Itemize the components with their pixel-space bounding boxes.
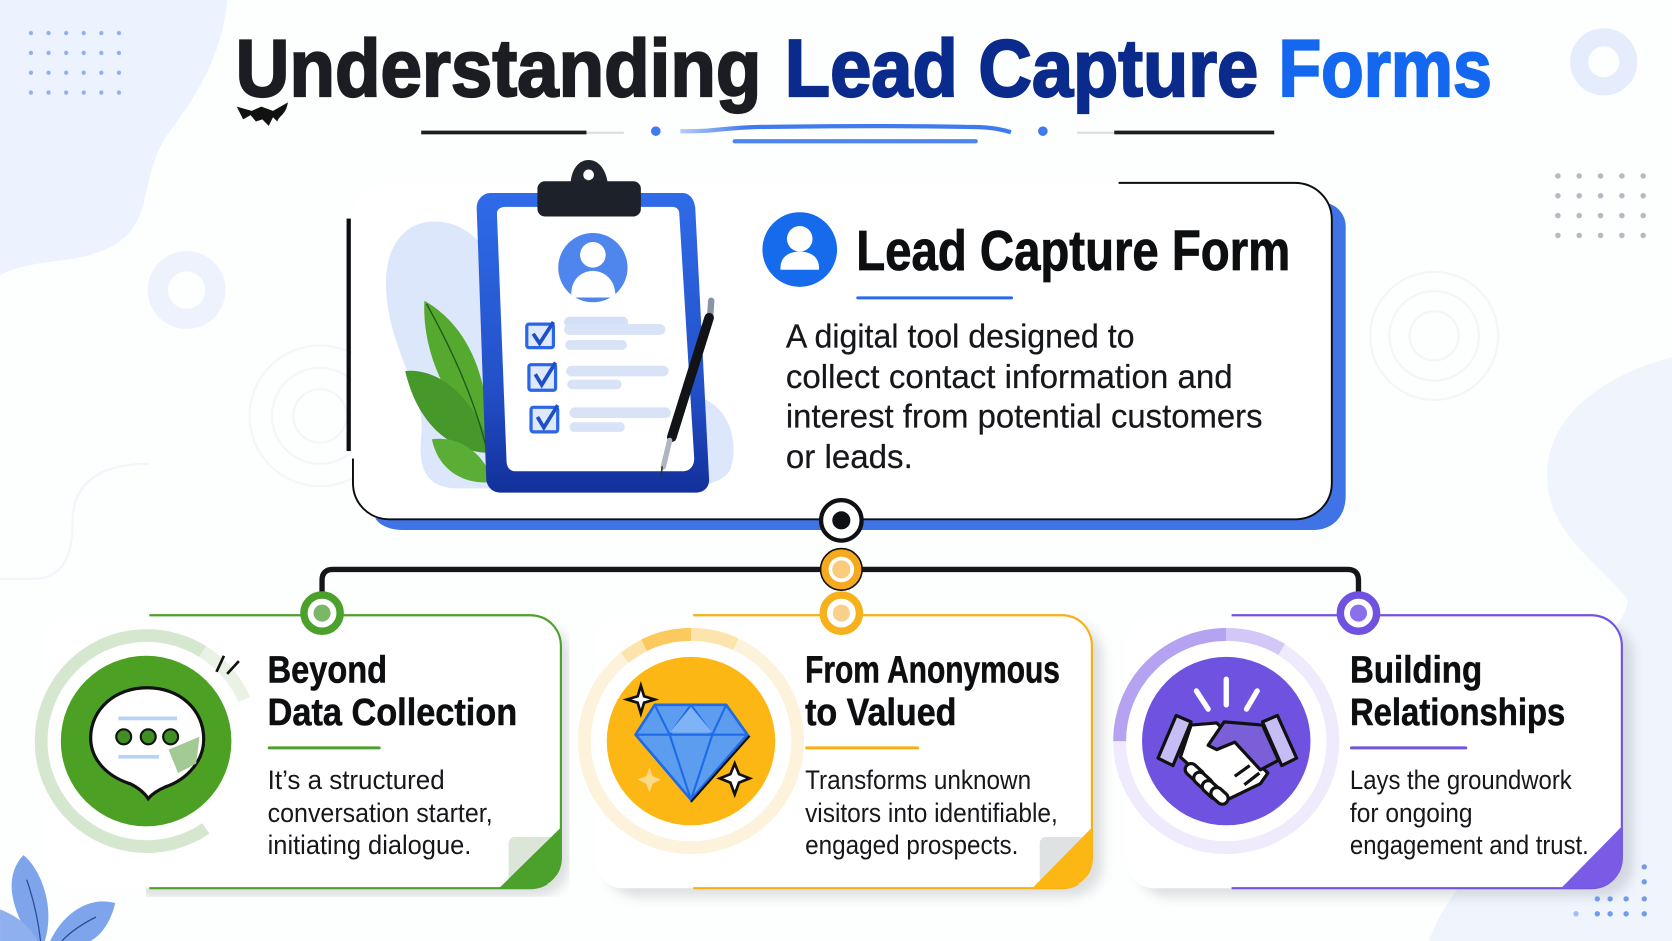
card text: conversation starter, [268, 798, 493, 828]
cuffs [1158, 715, 1191, 766]
description: or leads. [786, 439, 913, 476]
pen [661, 301, 711, 476]
card outline [353, 183, 1332, 519]
card title: Beyond [268, 648, 387, 691]
description: collect contact information and [786, 359, 1233, 396]
card underline [268, 746, 381, 749]
icon: speech bubble [41, 635, 244, 847]
card text: engaged prospects. [805, 830, 1018, 860]
card title: From Anonymous [805, 648, 1060, 691]
leaves [405, 301, 493, 483]
card left edge [347, 219, 351, 451]
decoration: dots bottom right [1573, 864, 1647, 916]
connector node [1340, 595, 1377, 631]
card body [352, 182, 1332, 519]
card outline [1232, 615, 1622, 888]
card title [1350, 648, 1565, 734]
decoration: faint line left [0, 464, 149, 579]
decoration: ring left [158, 261, 215, 319]
card title: Relationships [1350, 691, 1565, 734]
card underline [1350, 746, 1467, 749]
decoration: concentric rings right [1370, 272, 1498, 400]
card surface [606, 624, 1103, 897]
panel: lead capture form [347, 160, 1346, 530]
blob: right [1429, 357, 1672, 941]
fingers [1183, 761, 1231, 807]
connector node [304, 595, 340, 631]
card text [1350, 765, 1589, 860]
panel: from anonymous to valued [584, 595, 1103, 897]
corner fold [1561, 826, 1622, 888]
card text: for ongoing [1350, 798, 1473, 828]
card title: Building [1350, 648, 1482, 691]
decoration: dots top right [1551, 168, 1650, 241]
description [786, 319, 1263, 476]
decoration: leaves bottom left [0, 855, 115, 941]
card text: initiating dialogue. [268, 830, 471, 860]
heading underline [856, 296, 1013, 299]
panel: building relationships [1120, 595, 1634, 897]
card text: Lays the groundwork [1350, 765, 1572, 795]
card text: Transforms unknown [805, 765, 1031, 795]
card title: Data Collection [268, 691, 517, 734]
title: Forms [1279, 24, 1492, 114]
card outline [693, 615, 1092, 888]
blob: top left [0, 0, 227, 275]
card text [268, 765, 493, 860]
illustration: clipboard [386, 160, 734, 493]
card surface [146, 626, 570, 897]
card title: to Valued [805, 691, 956, 734]
icon: person badge [762, 212, 837, 287]
card outline [149, 615, 561, 888]
card title [268, 648, 517, 734]
card underline [805, 746, 919, 749]
card title [805, 648, 1060, 734]
board [477, 193, 709, 493]
connector lines [322, 569, 1358, 593]
paper [497, 207, 694, 471]
corner fold [1032, 827, 1092, 888]
description: A digital tool designed to [786, 319, 1135, 356]
decoration: concentric rings left [250, 345, 390, 486]
title: Understanding [236, 24, 761, 114]
decoration: dots top left [26, 27, 124, 98]
connector node: junction [821, 549, 862, 590]
decoration: ring top right [1579, 37, 1628, 86]
connector node: main [821, 500, 862, 541]
title: Lead Capture [785, 24, 1258, 114]
panel: beyond data collection [41, 595, 569, 897]
avatar [558, 233, 628, 302]
corner fold [499, 827, 561, 888]
clip [537, 160, 641, 216]
card shadow in blue [375, 203, 1346, 530]
connector node [823, 595, 859, 631]
icon: handshake [1120, 634, 1333, 848]
checklist row 1 [527, 317, 665, 350]
card text: It’s a structured [268, 765, 445, 795]
icon: diamond [584, 634, 798, 848]
checklist row 2 [529, 363, 669, 390]
description: interest from potential customers [786, 399, 1263, 436]
purple hand [1208, 722, 1279, 770]
card text: engagement and trust. [1350, 830, 1589, 860]
card text [805, 765, 1058, 860]
blue backdrop blob [386, 221, 734, 489]
checklist row 3 [531, 405, 671, 432]
title divider [421, 126, 1274, 143]
title [236, 24, 1492, 126]
white hand [1180, 723, 1268, 800]
card text: visitors into identifiable, [805, 798, 1058, 828]
heading: lead capture form: Lead Capture Form [856, 219, 1290, 282]
card surface [1137, 624, 1634, 897]
